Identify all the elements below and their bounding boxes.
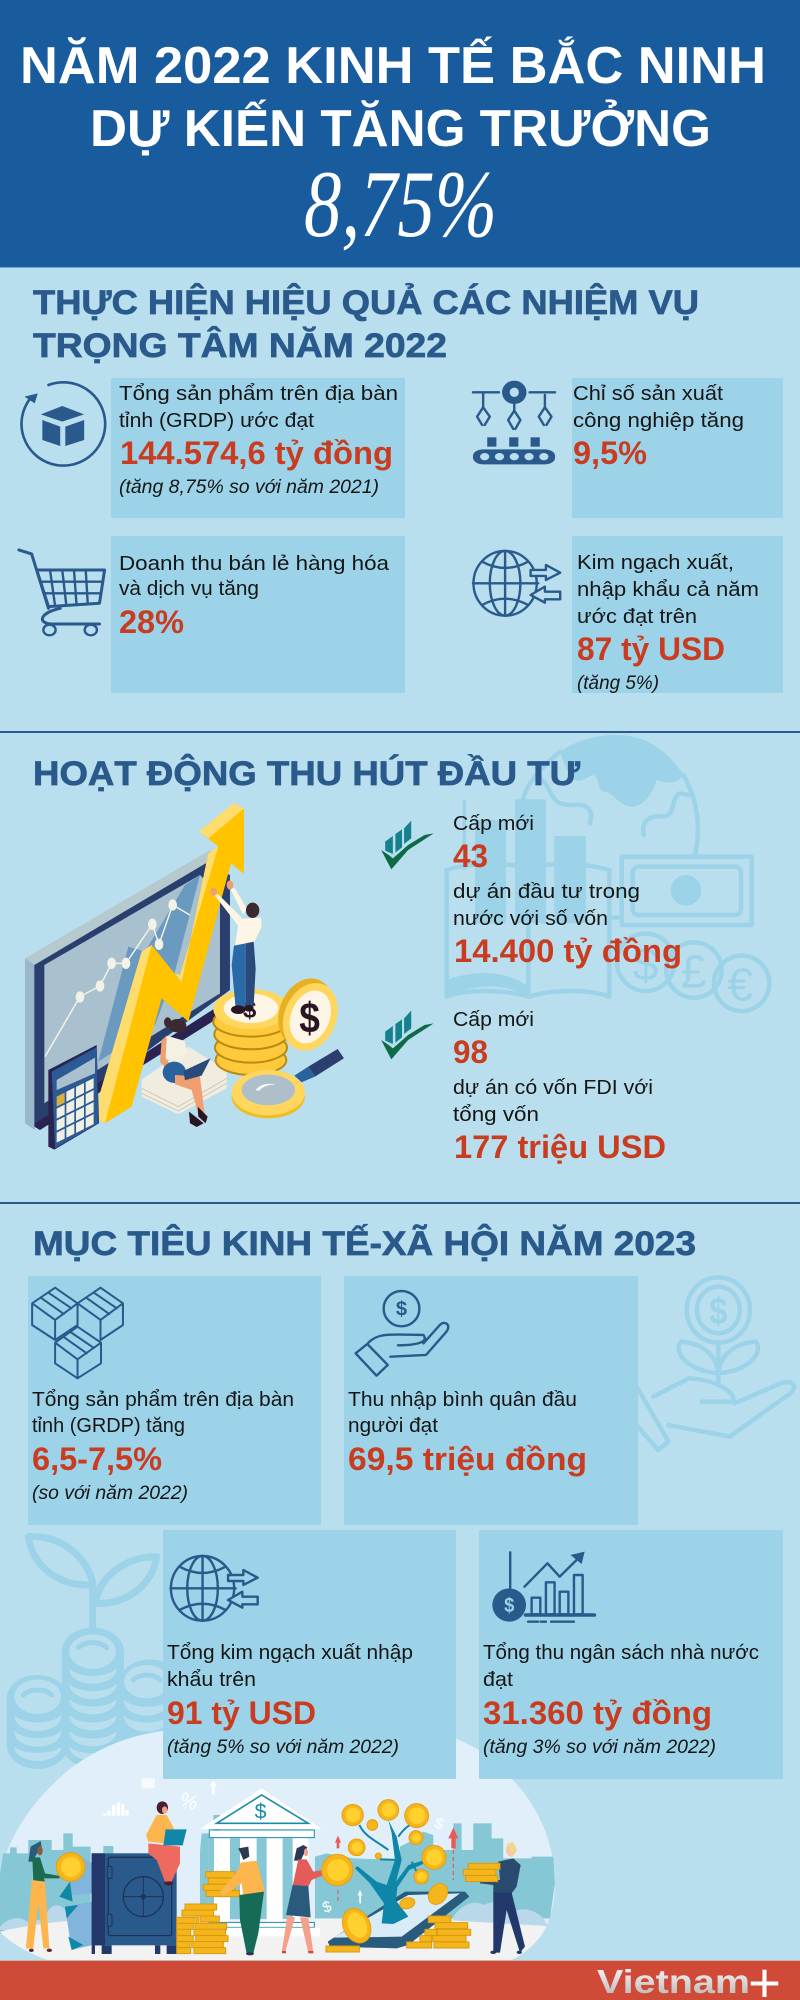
panel: retail revenue [111,536,405,693]
panel: GRDP target: Tổng sản phẩm trên địa bàn [32,1388,294,1411]
man reaching up [210,880,262,1014]
icon: stacked boxes [32,1288,123,1378]
money tree [355,1820,431,1924]
panel: GRDP: tỉnh (GRDP) ước đạt [119,409,314,432]
big coin with dollar sign [268,970,348,1059]
divider [0,1202,800,1204]
check icon 2 [381,1011,434,1059]
panel: export-import target [163,1530,456,1779]
icon: coin and bar chart: $ [504,1595,514,1617]
panel: income per capita [344,1276,638,1525]
panel: retail revenue: và dịch vụ tăng [119,577,259,600]
calculator [48,1045,99,1150]
icon: globe with arrows [170,1556,258,1621]
illustration: monitor, rising arrow, coins and people [25,803,348,1150]
panel: import-export turnover [572,536,783,694]
panel: GRDP: Tổng sản phẩm trên địa bàn [119,382,398,405]
logo: Vietnam+: Vietnam [597,1963,750,2000]
panel: state budget revenue: 31.360 tỷ đồng [483,1695,712,1731]
section 1 heading: THỰC HIỆN HIỆU QUẢ CÁC NHIỆM VỤ [33,284,699,322]
small white marks: % [177,1788,201,1815]
panel: retail revenue: 28% [119,604,184,640]
panel: import-export turnover: Kim ngạch xuất, [577,551,734,574]
investment block 2: FDI projects: tổng vốn [453,1103,539,1126]
small white marks [103,1778,217,1816]
panel: export-import target: khẩu trên [167,1668,256,1691]
investment block 1: domestic projects: 43 [453,838,488,874]
growth arrows and white marks: $ [320,1898,334,1917]
section 3: 2023 targets [7,1224,794,1769]
centre coin stack [62,1628,124,1768]
panel: export-import target: Tổng kim ngạch xuất nhập [167,1641,413,1664]
icon: box in circular arrow [22,382,105,466]
icon: hand holding coin [356,1291,448,1376]
left coin stack [7,1675,68,1769]
safe [92,1853,177,1954]
person: woman on safe with laptop [146,1801,187,1885]
investment block 1: domestic projects: nước với số vốn [453,907,608,930]
ghost background: plant growing from hand: $ [709,1290,728,1332]
investment block 2: FDI projects: Cấp mới [453,1008,534,1031]
panel: GRDP [111,378,405,518]
panel: GRDP target: tỉnh (GRDP) tăng [32,1414,185,1437]
panel: income per capita: Thu nhập bình quân đầu [348,1388,577,1411]
papers [142,1047,227,1114]
coin stack [213,989,289,1075]
title [20,36,766,158]
ghost background: plant growing from hand [638,1277,794,1450]
icon: coin and bar chart [492,1552,594,1622]
banknote [59,1858,93,1950]
person: man holding coins [463,1842,525,1954]
panel: retail revenue: Doanh thu bán lẻ hàng hóa [119,552,390,575]
title: NĂM 2022 KINH TẾ BẮC NINH [20,36,766,95]
investment block 1: domestic projects: Cấp mới [453,812,534,835]
icon: factory robot arms [473,381,555,464]
section 1 heading: TRỌNG TÂM NĂM 2022 [33,327,447,365]
divider [0,731,800,733]
phone [328,1892,469,1948]
investment block 2: FDI projects [453,1008,666,1165]
coin stack: $ [243,997,256,1024]
panel: GRDP target: 6,5-7,5% [32,1441,162,1477]
investment block 2: FDI projects: 98 [453,1034,488,1070]
icon: hand holding coin: $ [396,1299,407,1320]
illustration: finance scene in dome [0,1728,555,1961]
panel: state budget revenue: (tăng 3% so với năm 2022) [483,1736,716,1758]
panel: import-export turnover: 87 tỷ USD [577,631,725,667]
panel: GRDP target: (so với năm 2022) [32,1482,188,1504]
person: man carrying coins [220,1847,265,1955]
coin stacks [326,1916,471,1952]
panel: import-export turnover: ước đạt trên [577,605,697,628]
panel: GRDP target [28,1276,321,1525]
panel: industrial production: công nghiệp tăng [573,409,744,432]
ghost background: globe, book, banknote and coins [447,735,769,1011]
money tree coins [322,1800,452,1948]
big coin with dollar sign: $ [299,994,320,1042]
coin stacks [177,1872,239,1954]
panel: industrial production: Chỉ số sản xuất [573,382,723,405]
bushes and ground [0,1902,548,1961]
investment block 1: domestic projects [453,812,682,969]
title: DỰ KIẾN TĂNG TRƯỞNG [90,99,711,158]
bank building [200,1788,322,1936]
investment block 1: domestic projects: 14.400 tỷ đồng [454,933,682,969]
panel: import-export turnover: nhập khẩu cả năm [577,578,759,601]
panel: state budget revenue: Tổng thu ngân sách nhà nước [483,1641,759,1664]
logo: Vietnam+ [597,1951,781,2000]
header banner [0,0,800,268]
investment block 2: FDI projects: 177 triệu USD [454,1129,666,1165]
growth arrows and white marks [320,1815,458,1917]
illustration: tree, phone and remaining people [282,1800,525,1954]
right coin stack [120,1659,180,1753]
city skyline [0,1815,555,1933]
icon: shopping cart [19,550,105,635]
headline figure 8,75%: 8,75% [304,151,497,257]
panel: GRDP: 144.574,6 tỷ đồng [120,435,393,471]
section 2: investment attraction [25,735,769,1165]
panel: export-import target: 91 tỷ USD [167,1695,316,1731]
person: woman with coin [26,1841,85,1952]
section 1 heading [33,284,699,365]
panel: export-import target: (tăng 5% so với năm 2022) [167,1736,399,1758]
person: woman with big coin [282,1845,332,1953]
ghost background: globe, book, banknote and coins: £ [681,945,707,997]
panel: income per capita: người đạt [348,1414,438,1437]
magnifying glass [232,1049,344,1118]
panel: import-export turnover: (tăng 5%) [577,672,659,694]
woman with laptop [160,1017,211,1127]
ghost background: plant on coin stacks [7,1537,180,1769]
investment block 2: FDI projects: dự án có vốn FDI với [453,1076,653,1099]
investment block 1: domestic projects: dự án đầu tư trong [453,880,640,903]
monitor [25,850,230,1130]
panel: state budget revenue: đạt [483,1668,513,1691]
panel: GRDP: (tăng 8,75% so với năm 2021) [119,476,379,498]
check icon 1 [381,821,434,869]
section 1: tasks of 2022 [19,284,783,694]
panel: industrial production [572,378,783,518]
ghost background: globe, book, banknote and coins: $ [633,938,659,990]
ghost background: globe, book, banknote and coins: € [727,959,753,1011]
panel: industrial production: 9,5% [573,435,647,471]
rising yellow arrow [99,803,244,1123]
panel: income per capita: 69,5 triệu đồng [348,1441,587,1477]
icon: globe with arrows [473,551,560,616]
bank building: $ [255,1800,267,1824]
growth arrows and white marks: $ [432,1815,446,1834]
footer bar [0,1951,800,2000]
section 2 heading: HOẠT ĐỘNG THU HÚT ĐẦU TƯ [33,754,581,793]
panel: state budget revenue [479,1530,783,1779]
section 3 heading: MỤC TIÊU KINH TẾ-XÃ HỘI NĂM 2023 [33,1224,696,1263]
